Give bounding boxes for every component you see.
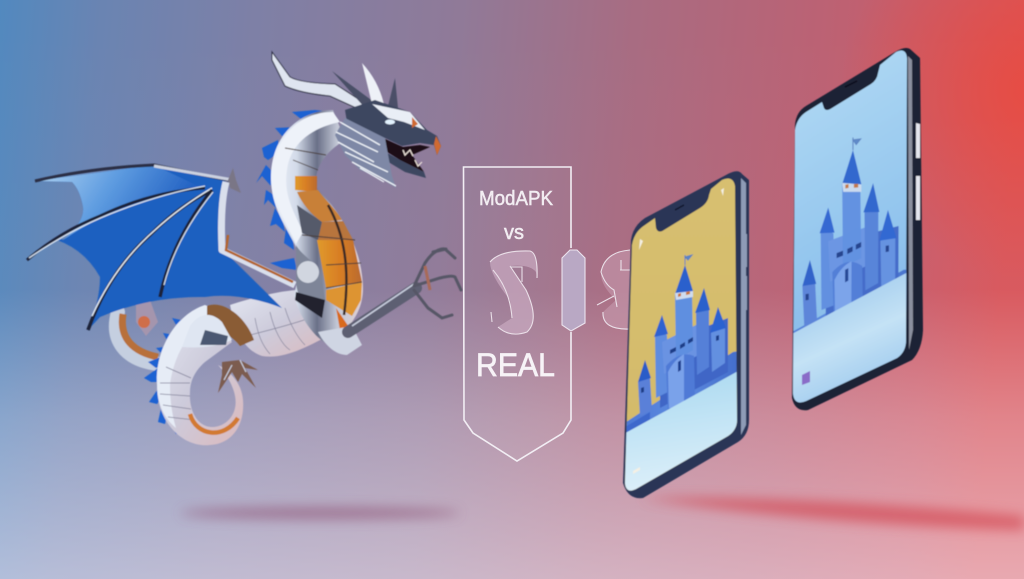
banner outline bbox=[464, 167, 571, 461]
phone 2 screen bbox=[792, 50, 908, 404]
decorative letter S: right bbox=[597, 250, 631, 330]
phone 1 side buttons bbox=[741, 178, 747, 435]
phone 2: blue screen bbox=[783, 45, 923, 410]
dragon: tail spines bbox=[144, 318, 190, 434]
phone 2 screen icon bbox=[802, 371, 810, 385]
ModAPK vs REAL banner bbox=[464, 167, 631, 461]
decorative pill I bbox=[562, 250, 585, 331]
dragon: head bbox=[272, 52, 441, 188]
dragon: wing bbox=[27, 165, 295, 330]
phone 2 snow bbox=[790, 271, 910, 410]
dragon: hind foot bbox=[218, 360, 258, 393]
banner text: ModAPK: ModAPK bbox=[479, 188, 554, 210]
banner text: vs: vs bbox=[504, 222, 524, 244]
dragon: tail bbox=[157, 305, 243, 445]
phone 2 side buttons bbox=[908, 56, 913, 350]
phone 2 castle bbox=[792, 137, 907, 334]
dragon: lower body and hip bbox=[182, 290, 330, 357]
decorative letter S: left bbox=[490, 251, 537, 334]
phone 1 speaker bbox=[675, 205, 684, 210]
phone 2 speaker bbox=[845, 81, 857, 87]
phone 2 body bbox=[792, 48, 923, 410]
dragon: foreleg and claws bbox=[318, 249, 461, 355]
phone 1 screen icons bbox=[633, 188, 724, 474]
phone 1 screen bbox=[624, 178, 738, 492]
phone 1 castle bbox=[626, 254, 738, 444]
floor shadow: dragon bbox=[180, 507, 460, 519]
banner text: REAL: REAL bbox=[476, 347, 555, 383]
dragon: back spines bbox=[256, 110, 332, 270]
dragon: rear coil bbox=[116, 300, 158, 364]
phone 1 body bbox=[623, 171, 749, 498]
phone 1 snow bbox=[624, 372, 738, 492]
dragon: neck and torso bbox=[271, 110, 363, 345]
floor shadow: phones bbox=[640, 498, 1024, 530]
dragon illustration bbox=[27, 52, 461, 445]
phone 1: yellow screen bbox=[620, 170, 749, 500]
